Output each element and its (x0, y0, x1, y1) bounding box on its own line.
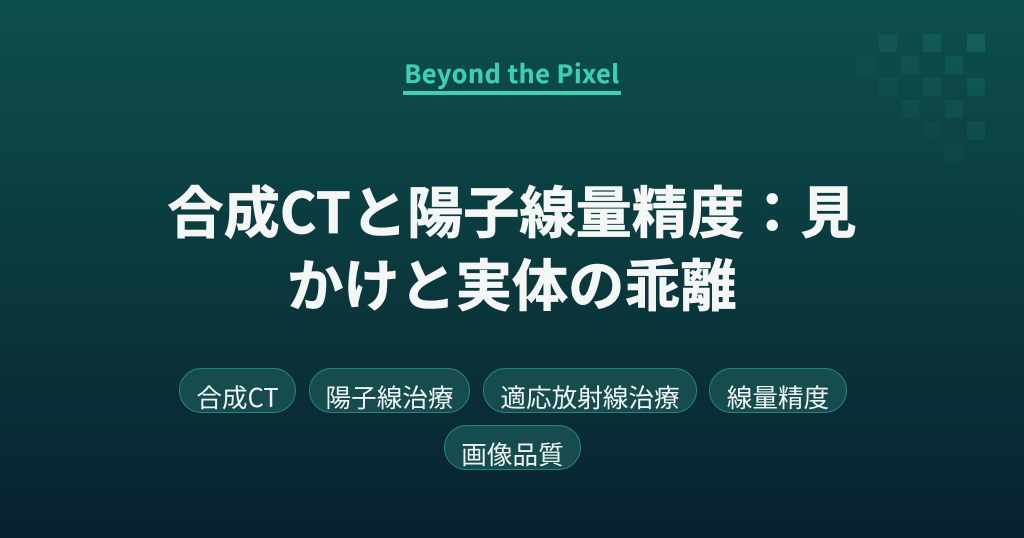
tag: 陽子線治療: 陽子線治療 (326, 378, 453, 414)
tag: 陽子線治療 (309, 368, 470, 412)
tag: 線量精度: 線量精度 (727, 378, 829, 414)
title (167, 169, 857, 323)
brand label: Beyond the Pixel: Beyond the Pixel (404, 55, 620, 91)
tag: 適応放射線治療 (483, 368, 697, 412)
tag: 画像品質: 画像品質 (461, 434, 564, 472)
tag: 線量精度 (709, 368, 847, 412)
title: 合成CTと陽子線量精度：見 (167, 169, 857, 250)
decorative pixel grid (879, 34, 985, 140)
tag: 合成CT: 合成CT (196, 378, 279, 414)
tag: 画像品質 (444, 424, 581, 470)
title: かけと実体の乖離 (287, 242, 737, 323)
tag: 合成CT (179, 368, 296, 412)
tag: 適応放射線治療: 適応放射線治療 (500, 378, 680, 414)
